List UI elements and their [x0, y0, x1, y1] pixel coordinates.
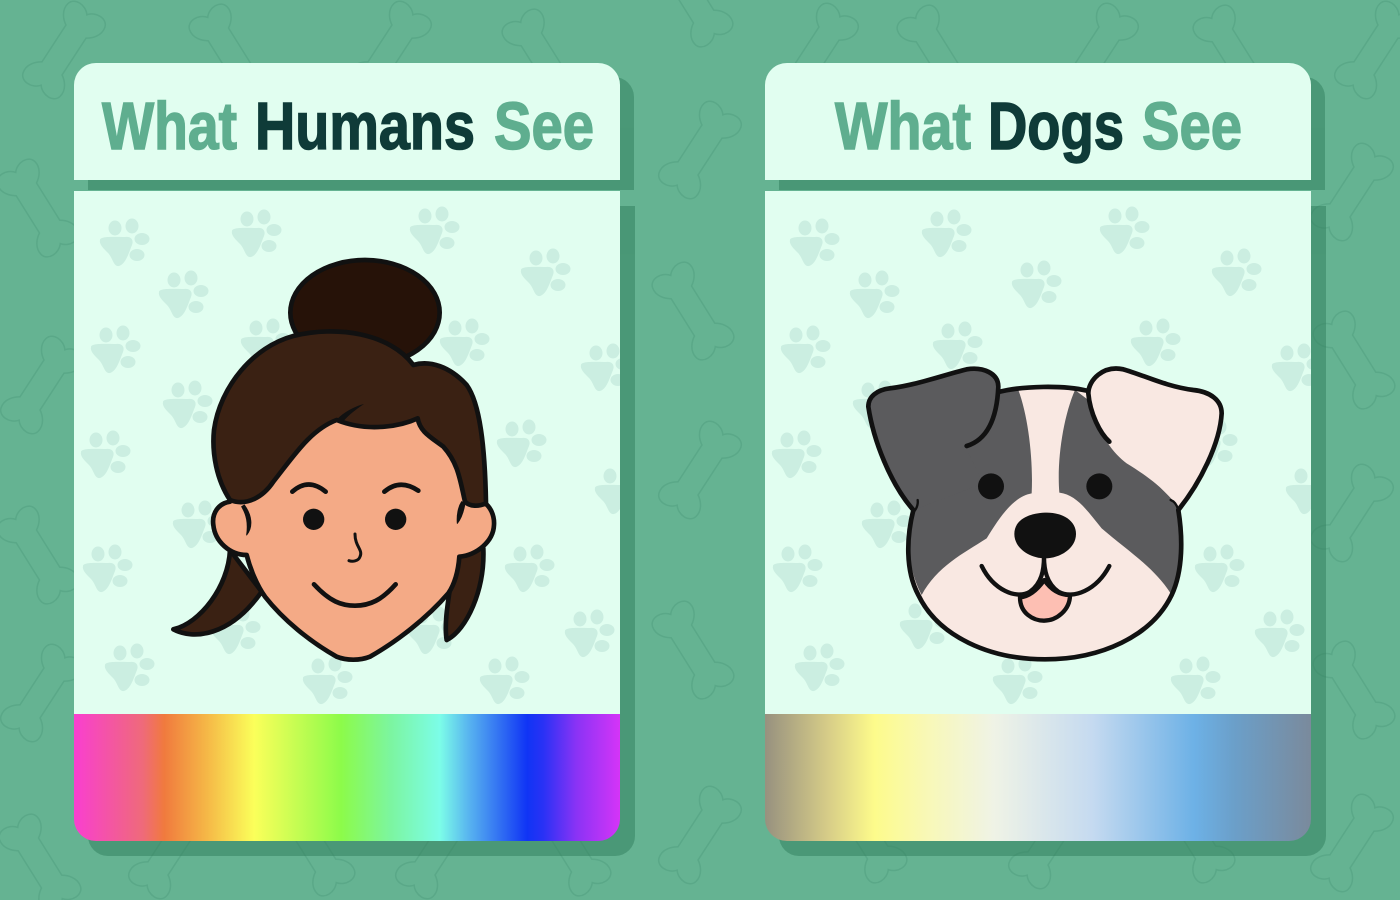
heading: what dogs see: See	[1142, 89, 1242, 164]
heading: what humans see: Humans	[255, 89, 475, 164]
heading: what humans see	[74, 63, 620, 180]
panel: what humans see	[74, 63, 644, 856]
brows, nose and mouth	[292, 484, 418, 606]
nose	[1014, 513, 1076, 558]
eyes	[978, 473, 1004, 499]
icon: dog's face	[868, 369, 1222, 659]
eyes	[303, 509, 324, 530]
picture area: humans	[74, 191, 620, 714]
mouth	[982, 557, 1109, 595]
grey face patches	[909, 390, 1032, 595]
heading: what humans see: What	[102, 89, 237, 164]
left ear	[868, 369, 998, 510]
heading: what dogs see	[765, 63, 1311, 180]
heading: what humans see: See	[494, 89, 594, 164]
panel shadow: dogs	[779, 77, 1326, 856]
panel shadow: humans	[88, 77, 635, 856]
colour spectrum: dogs	[765, 714, 1311, 841]
ear shadows	[242, 505, 251, 535]
main hair	[213, 331, 486, 506]
tongue	[1020, 580, 1070, 621]
hair parting	[335, 404, 364, 423]
heading: what dogs see: What	[835, 89, 971, 164]
face and ears	[213, 400, 494, 660]
icon: woman's face	[173, 260, 494, 660]
head outline	[908, 387, 1181, 659]
hair strands	[173, 548, 483, 640]
picture area: dogs	[765, 191, 1311, 714]
right ear	[1088, 369, 1222, 510]
colour spectrum: humans	[74, 714, 620, 841]
panel: what dogs see	[765, 63, 1336, 856]
head	[908, 387, 1181, 659]
hair bun	[290, 260, 440, 365]
heading: what dogs see: Dogs	[988, 89, 1124, 164]
